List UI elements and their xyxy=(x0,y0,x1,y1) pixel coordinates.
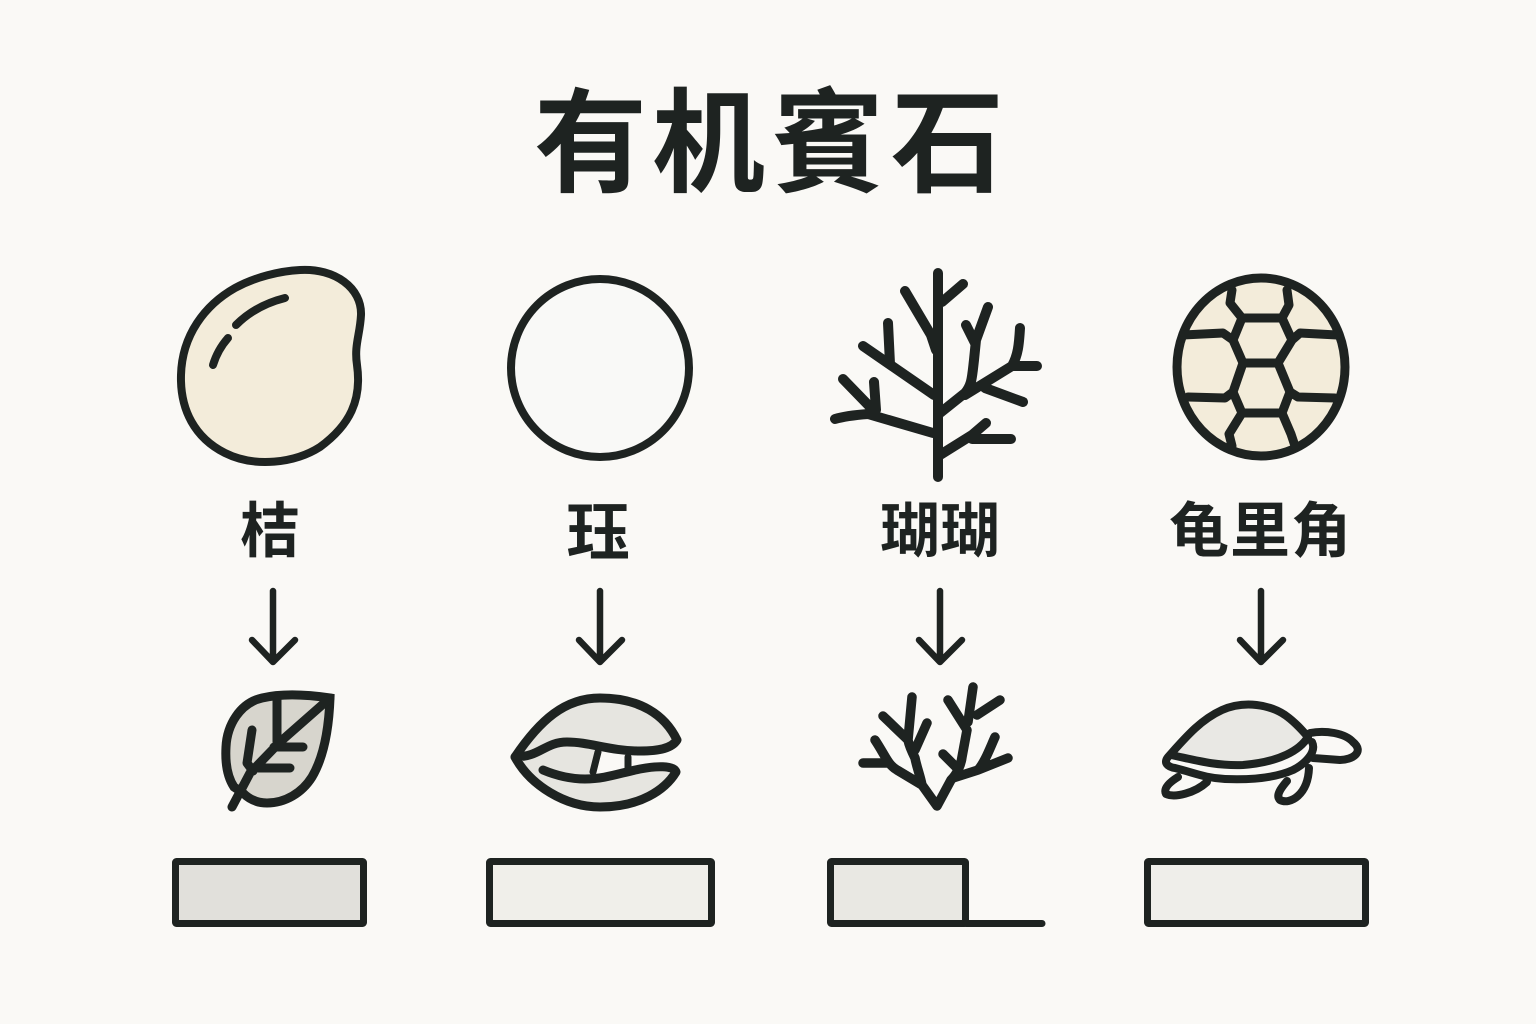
arrow: amber to source xyxy=(252,591,295,662)
column: pearl xyxy=(490,279,712,924)
bar: coral xyxy=(830,862,1042,924)
label: tortoiseshell: 龟里角 xyxy=(1169,498,1351,565)
arrow: pearl to source xyxy=(579,591,622,662)
icon: coral branch xyxy=(835,273,1037,477)
icon: clam xyxy=(515,698,677,807)
column: tortoiseshell xyxy=(1148,278,1366,924)
label: pearl: 珏 xyxy=(566,497,630,569)
label: amber: 桔 xyxy=(240,498,300,565)
label: coral: 瑚瑚 xyxy=(880,498,1000,565)
bar: pearl xyxy=(490,862,712,924)
icon: amber stone xyxy=(181,270,361,462)
column: amber xyxy=(176,270,364,924)
column: coral xyxy=(830,273,1042,924)
bar: tortoiseshell xyxy=(1148,862,1366,924)
icon: coral xyxy=(863,687,1008,806)
title: 有机賓石 xyxy=(534,81,1004,207)
arrow: tortoiseshell to source xyxy=(1240,591,1283,662)
arrow: coral to source xyxy=(919,591,962,662)
bar: amber xyxy=(176,862,364,924)
icon: leaf xyxy=(226,695,330,807)
icon: turtle xyxy=(1165,705,1358,801)
icon: pearl xyxy=(511,279,689,457)
icon: tortoiseshell xyxy=(1177,278,1345,456)
